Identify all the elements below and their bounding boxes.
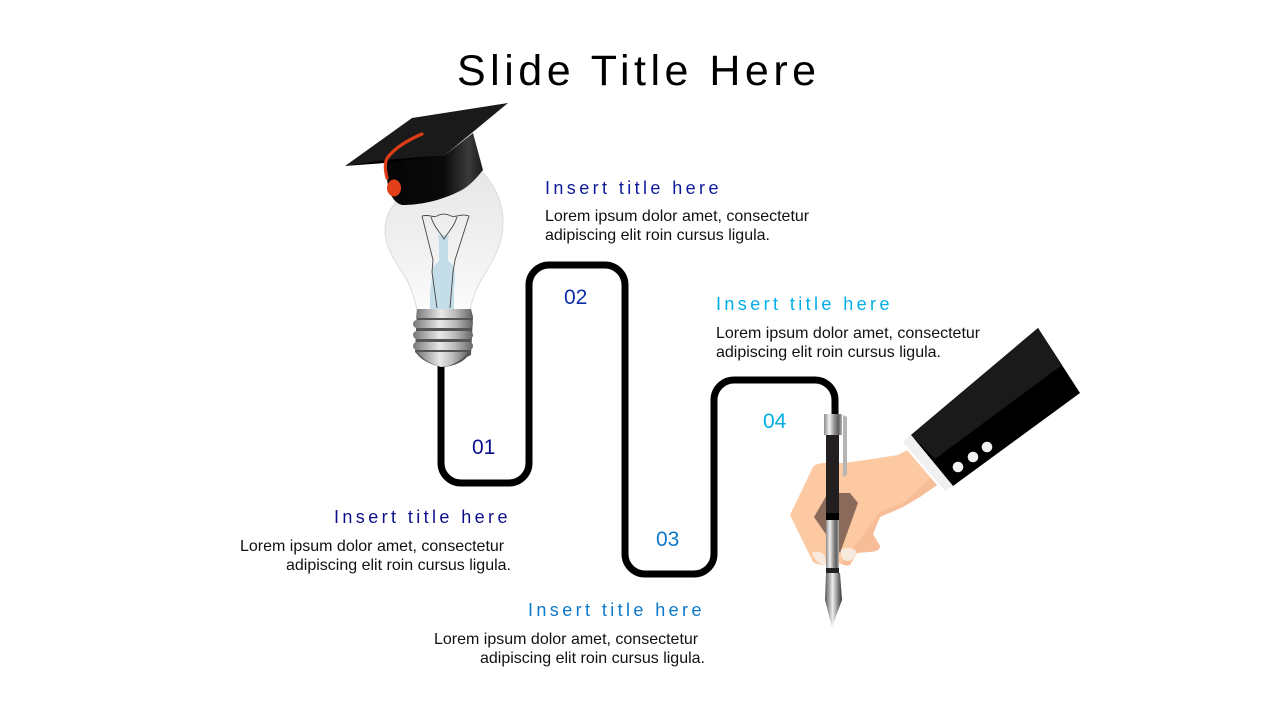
text block 04: Lorem ipsum dolor amet, consectetur bbox=[716, 325, 981, 342]
cuff buttons bbox=[953, 442, 992, 472]
text block 01: Insert title here bbox=[334, 507, 511, 527]
text block 04: Insert title here bbox=[716, 294, 893, 314]
winding path connector bbox=[441, 265, 835, 574]
step 03 number: 03 bbox=[656, 528, 679, 551]
text block 03: Lorem ipsum dolor amet, consectetur bbox=[434, 631, 699, 648]
text block 02 bbox=[545, 178, 810, 244]
hand shading bbox=[842, 478, 937, 565]
icon: light bulb with graduation cap bbox=[345, 103, 508, 367]
graduation cap bbox=[345, 103, 508, 205]
sleeve bbox=[911, 328, 1080, 486]
step 01 number: 01 bbox=[472, 436, 495, 459]
cuff bbox=[903, 435, 953, 491]
bulb filament bbox=[422, 214, 469, 308]
icon: hand holding pen bbox=[790, 328, 1080, 627]
title: Slide Title Here bbox=[457, 47, 821, 95]
text block 02: Insert title here bbox=[545, 178, 722, 198]
bulb stem bbox=[430, 235, 455, 313]
text block 01: Lorem ipsum dolor amet, consectetur bbox=[240, 538, 505, 555]
text block 02: adipiscing elit roin cursus ligula. bbox=[545, 227, 770, 244]
step 04 number: 04 bbox=[763, 410, 787, 433]
text block 04: adipiscing elit roin cursus ligula. bbox=[716, 344, 941, 361]
text block 03: Insert title here bbox=[528, 600, 705, 620]
thumb shadow bbox=[814, 493, 858, 553]
fingernails bbox=[812, 552, 826, 565]
text block 03: adipiscing elit roin cursus ligula. bbox=[480, 650, 705, 667]
bulb glass bbox=[385, 164, 503, 310]
text block 04 bbox=[716, 294, 981, 361]
text block 01 bbox=[240, 507, 511, 574]
text block 01: adipiscing elit roin cursus ligula. bbox=[286, 557, 511, 574]
pen bbox=[824, 414, 847, 627]
bulb screw base bbox=[413, 309, 473, 367]
text block 02: Lorem ipsum dolor amet, consectetur bbox=[545, 208, 810, 225]
step 02 number: 02 bbox=[564, 286, 587, 309]
hand bbox=[790, 450, 937, 565]
tassel bbox=[385, 134, 422, 178]
text block 03 bbox=[434, 600, 705, 667]
